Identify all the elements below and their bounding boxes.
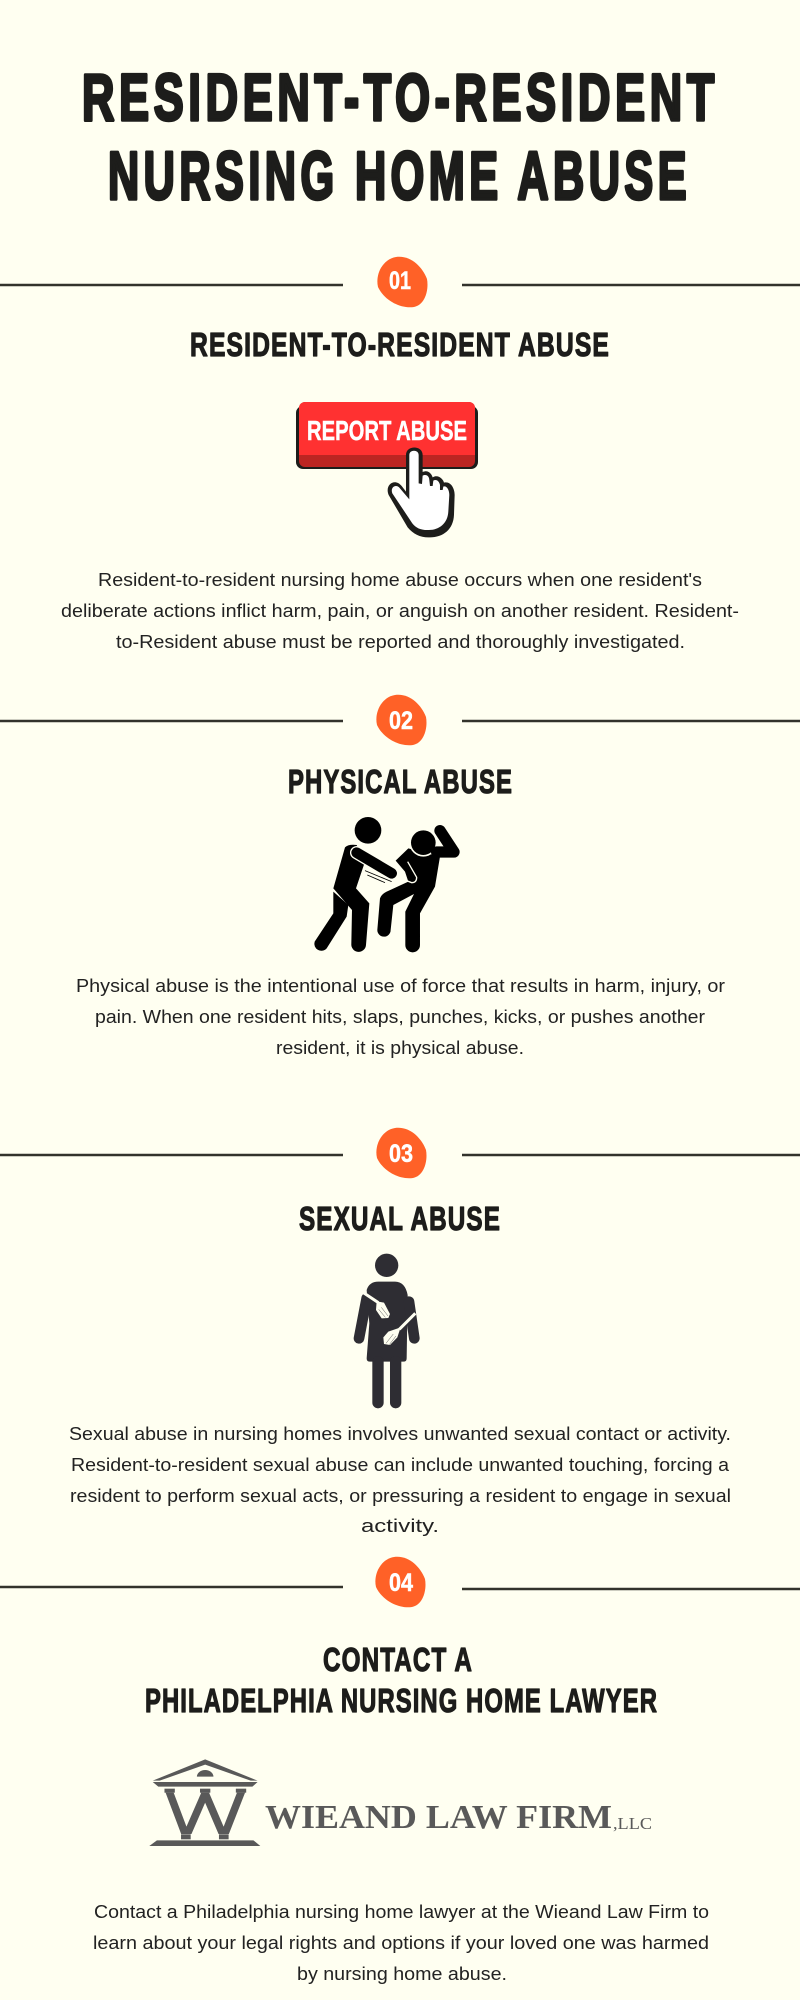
title — [82, 60, 719, 214]
icon: figure with unwanted hands — [359, 1254, 415, 1403]
logo: Wieand Law Firm: WIEAND LAW FIRM — [265, 1799, 612, 1836]
text block: deliberate actions inflict harm, pain, or anguish on another resident. Resident- — [61, 600, 739, 621]
text block — [93, 1901, 709, 1984]
heading — [145, 1641, 658, 1719]
text block: Physical abuse is the intentional use of force that results in harm, injury, or — [76, 975, 725, 996]
panel: section 1 — [0, 257, 800, 652]
number badge 02: 02 — [389, 707, 413, 735]
icon: report abuse button with hand cursor — [296, 402, 478, 537]
heading: SEXUAL ABUSE — [299, 1200, 501, 1237]
text block: to-Resident abuse must be reported and thoroughly investigated. — [116, 631, 685, 652]
heading: PHYSICAL ABUSE — [288, 763, 513, 800]
heading: RESIDENT-TO-RESIDENT ABUSE — [190, 326, 610, 363]
panel: section 4 — [0, 1557, 800, 1984]
text block: Resident-to-resident sexual abuse can include unwanted touching, forcing a — [71, 1454, 730, 1475]
number badge 04 — [375, 1557, 425, 1607]
number badge 01 — [377, 257, 427, 307]
number badge 03: 03 — [389, 1140, 413, 1168]
text block: Sexual abuse in nursing homes involves unwanted sexual contact or activity. — [69, 1423, 731, 1444]
text block: learn about your legal rights and options if your loved one was harmed — [93, 1932, 709, 1953]
logo: Wieand Law Firm: ,LLC — [613, 1814, 652, 1833]
number badge 01: 01 — [389, 267, 411, 295]
number badge 02 — [376, 695, 426, 745]
icon: report abuse button with hand cursor: REPORT ABUSE — [307, 415, 467, 446]
text block: resident to perform sexual acts, or pressuring a resident to engage in sexual — [70, 1485, 731, 1506]
text block: Contact a Philadelphia nursing home lawyer at the Wieand Law Firm to — [94, 1901, 709, 1922]
text block — [61, 569, 739, 652]
panel: section 3 — [0, 1128, 800, 1536]
text block: activity. — [361, 1515, 439, 1536]
text block — [69, 1423, 731, 1536]
text block: pain. When one resident hits, slaps, punches, kicks, or pushes another — [95, 1006, 705, 1027]
text block: resident, it is physical abuse. — [276, 1037, 524, 1058]
panel: section 2 — [0, 695, 800, 1058]
logo: Wieand Law Firm — [149, 1759, 652, 1846]
icon: one person pushing another — [314, 817, 454, 952]
text block: by nursing home abuse. — [297, 1963, 507, 1984]
heading: CONTACT A — [323, 1641, 473, 1678]
number badge 04: 04 — [389, 1569, 413, 1597]
text block — [76, 975, 725, 1058]
number badge 03 — [376, 1128, 426, 1178]
text block: Resident-to-resident nursing home abuse occurs when one resident's — [98, 569, 702, 590]
